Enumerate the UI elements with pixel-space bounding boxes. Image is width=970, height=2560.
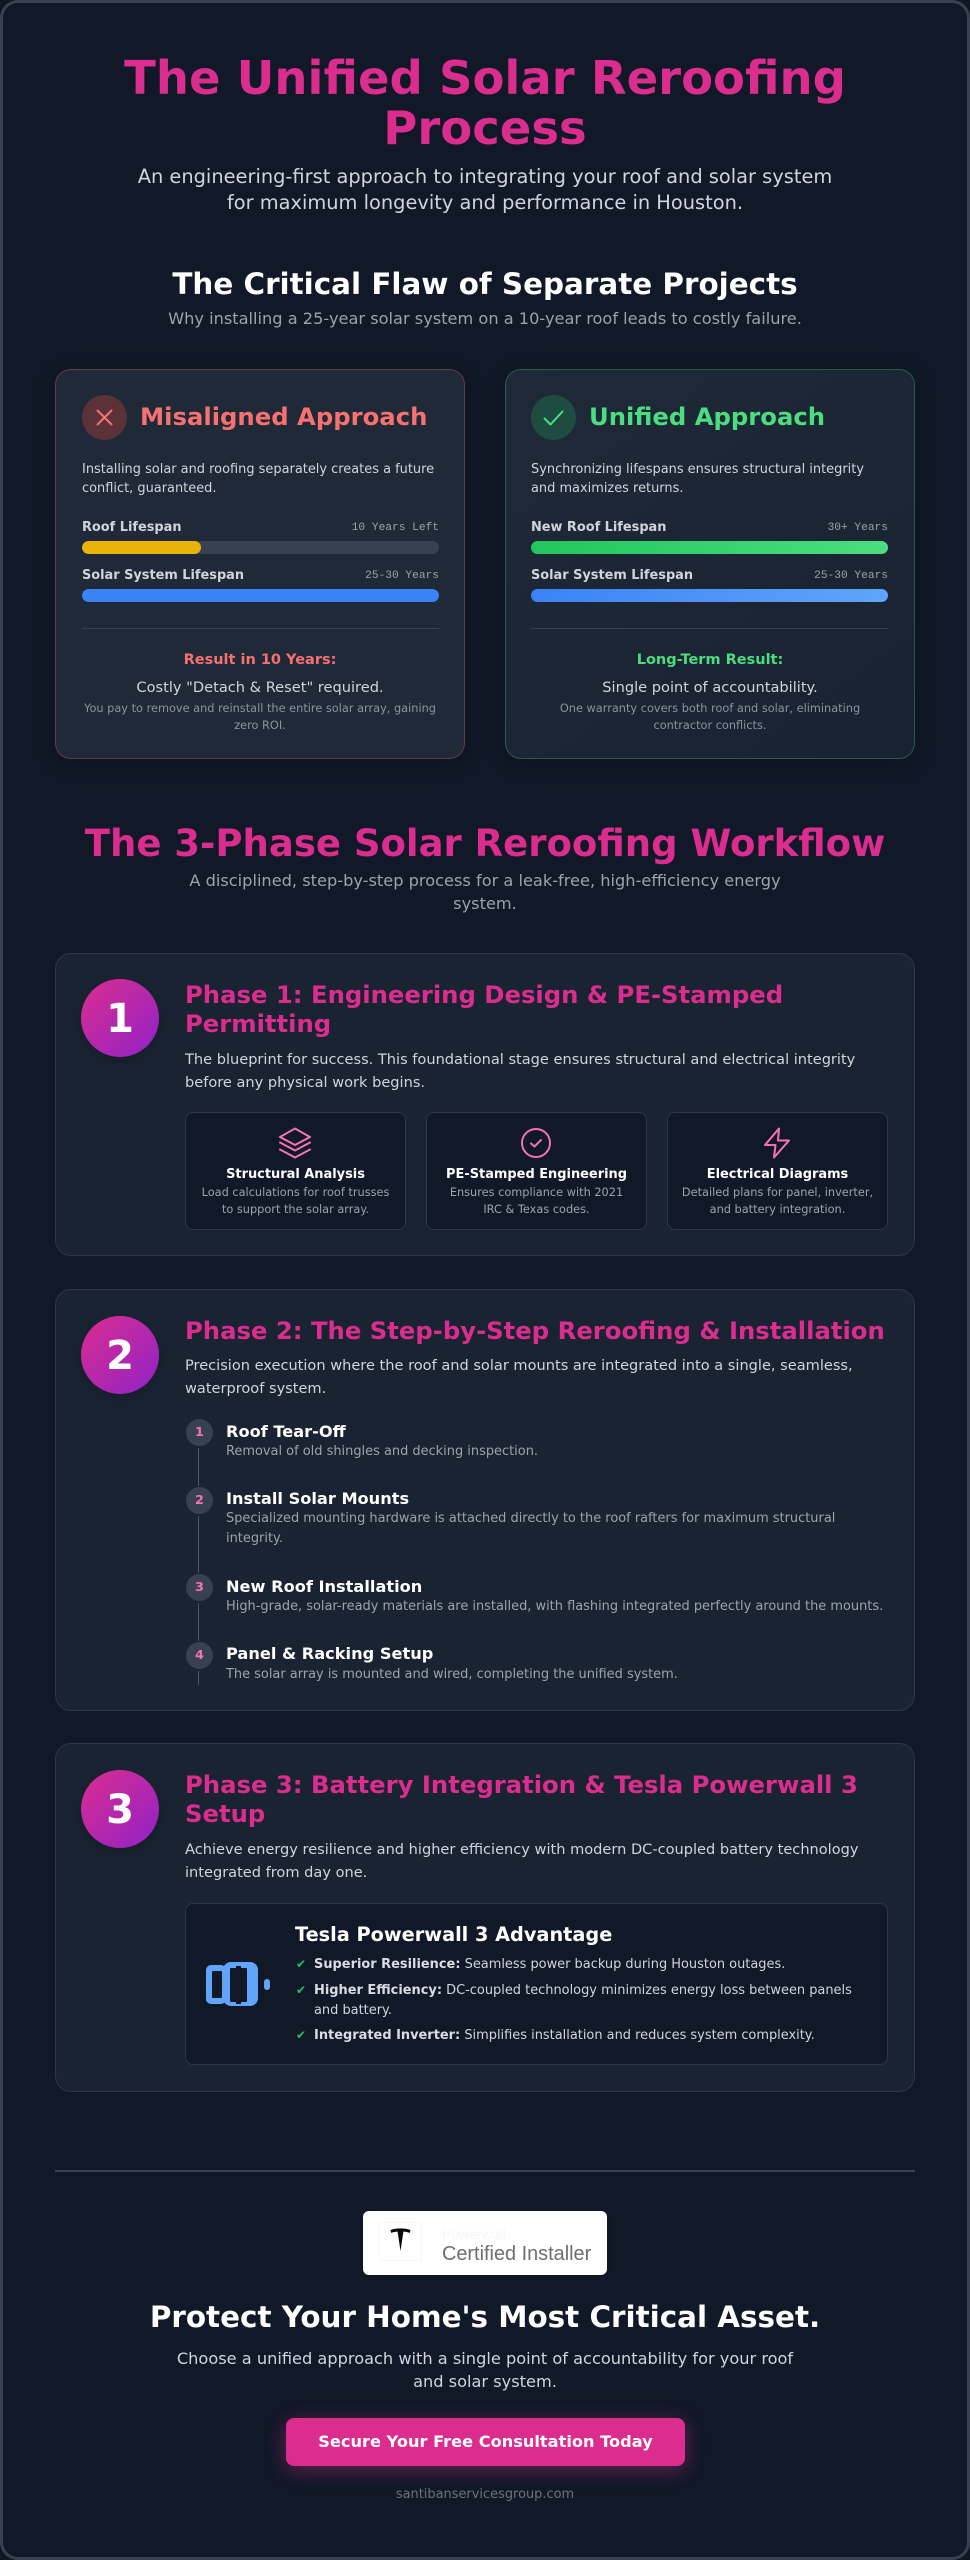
phase 1 description [184,1051,855,1091]
roof lifespan bar [82,541,439,554]
roof lifespan label: Roof Lifespan [82,520,182,535]
subheading: workflow [189,871,781,913]
website: santibanservicesgroup.com [396,2487,574,2502]
logo box [379,2222,422,2261]
closing text [177,2349,794,2391]
icon: x mark [82,395,127,440]
pe-stamped title: PE-Stamped Engineering [446,1167,627,1182]
electrical diagrams text: and battery integration. [710,1202,845,1216]
step 4 marker [186,1642,213,1669]
unified heading: Unified Approach [589,402,825,431]
phase 1 heading: Phase 1: Engineering Design & PE-Stamped [185,980,783,1009]
step 1 marker [186,1419,213,1446]
phase 1 description: The blueprint for success. This foundational stage ensures structural and electrical integrity [185,1051,855,1068]
new roof lifespan label: New Roof Lifespan [531,520,666,535]
subheading: workflow: A disciplined, step-by-step process for a leak-free, high-efficiency energy [189,871,781,890]
title: The Unified Solar Reroofing [124,51,846,105]
call to action button: Secure Your Free Consultation Today [318,2432,653,2451]
misaligned description [82,462,434,496]
result detail: You pay to remove and reinstall the entire solar array, gaining [84,701,436,715]
step 3 text: High-grade, solar-ready materials are installed, with flashing integrated perfectly around the mounts. [226,1599,883,1614]
electrical diagrams text [682,1185,873,1216]
subtitle: An engineering-first approach to integrating your roof and solar system [138,165,832,188]
panel: powerwall advantage [185,1903,888,2065]
step 4 text: The solar array is mounted and wired, completing the unified system. [226,1667,678,1682]
panel: phase 3 [55,1743,915,2092]
phase 3 number: 3 [106,1787,134,1833]
unified solar lifespan bar [531,589,888,602]
benefit 2: Higher Efficiency: DC-coupled technology minimizes energy loss between panels [314,1983,852,1998]
solar lifespan bar [82,589,439,602]
step 2 text: integrity. [226,1530,283,1546]
panel: misaligned approach [55,369,465,759]
step 3 marker: 3 [195,1580,204,1595]
unified solar lifespan label: Solar System Lifespan [531,568,693,583]
pe-stamped text [450,1185,623,1216]
unified description: Synchronizing lifespans ensures structural integrity [531,462,864,477]
step 3 marker [186,1574,213,1601]
pe-stamped text: IRC & Texas codes. [483,1202,590,1216]
sub-card: pe-stamped engineering [426,1112,647,1230]
benefit check 1: ✔ [296,1957,306,1971]
step 2 title: Install Solar Mounts [226,1489,409,1508]
title: Process [383,100,587,154]
benefit 2 [314,1983,852,2018]
call to action button [286,2418,685,2466]
heading: workflow: The 3-Phase Solar Reroofing Workflow [85,822,885,865]
subtitle [138,165,832,214]
result detail: zero ROI. [234,718,286,732]
phase 1 number [81,979,159,1057]
step 4 marker: 4 [195,1648,204,1663]
step 4 title: Panel & Racking Setup [226,1644,433,1663]
structural analysis text: to support the solar array. [222,1202,369,1216]
solar lifespan label: Solar System Lifespan [82,568,244,583]
result detail [84,701,436,732]
phase 3 description: integrated from day one. [185,1864,367,1881]
benefit check 2: ✔ [296,1983,306,1997]
phase 3 description [185,1841,859,1881]
panel: phase 1 [55,953,915,1256]
misaligned description: Installing solar and roofing separately creates a future [82,462,434,477]
electrical diagrams text: Detailed plans for panel, inverter, [682,1185,873,1199]
benefit 1: Superior Resilience: Seamless power backup during Houston outages. [314,1957,785,1972]
benefit 3: Integrated Inverter: Simplifies installation and reduces system complexity. [314,2028,815,2043]
unified description [531,462,864,496]
result text: Costly "Detach & Reset" required. [136,679,384,696]
unified solar lifespan value: 25-30 Years [814,570,888,582]
phase 1 heading [185,980,783,1038]
sub-card: structural analysis [185,1112,406,1230]
phase 2 description: Precision execution where the roof and solar mounts are integrated into a single, seamless, [185,1357,853,1374]
closing heading: Protect Your Home's Most Critical Asset. [150,2300,820,2334]
step 3 title: New Roof Installation [226,1577,422,1596]
long-term text: Single point of accountability. [602,679,818,696]
new roof lifespan bar [531,541,888,554]
icon: lightning bolt [764,1128,790,1158]
phase 3 heading [185,1770,858,1828]
subheading: workflow: system. [453,894,517,913]
benefit check 3: ✔ [296,2028,306,2042]
phase 2 number: 2 [106,1333,134,1379]
title [124,51,846,154]
powerwall heading: Tesla Powerwall 3 Advantage [295,1923,612,1946]
faint badge label: Powerwall [442,2226,506,2242]
panel: phase 2 [55,1289,915,1711]
step 2 marker: 2 [195,1493,204,1508]
step 1 title: Roof Tear-Off [226,1422,346,1441]
icon: check circle [521,1128,551,1158]
subtitle: for maximum longevity and performance in Houston. [227,191,743,214]
phase 3 heading: Setup [185,1799,265,1828]
phase 2 description: waterproof system. [185,1380,326,1397]
long-term detail: One warranty covers both roof and solar, eliminating [560,701,860,715]
phase 3 heading: Phase 3: Battery Integration & Tesla Powerwall 3 [185,1770,858,1799]
electrical diagrams title: Electrical Diagrams [707,1167,848,1182]
sub-card: electrical diagrams [667,1112,888,1230]
benefit 2: and battery. [314,2002,392,2018]
long-term detail [560,701,860,732]
step 1 text: Removal of old shingles and decking inspection. [226,1444,538,1459]
phase 1 number: 1 [106,996,134,1042]
structural analysis title: Structural Analysis [226,1167,365,1182]
phase 2 heading: Phase 2: The Step-by-Step Reroofing & Installation [185,1316,885,1345]
roof lifespan value: 10 Years Left [352,522,439,534]
phase 3 number [81,1770,159,1848]
phase 3 description: Achieve energy resilience and higher efficiency with modern DC-coupled battery technology [185,1841,859,1858]
icon: battery [206,1962,270,2006]
phase 1 heading: Permitting [185,1009,331,1038]
long-term heading: Long-Term Result: [637,652,783,668]
icon: layers [279,1128,311,1158]
closing text: Choose a unified approach with a single point of accountability for your roof [177,2349,793,2368]
solar lifespan value: 25-30 Years [365,570,439,582]
badge: tesla certified installer [363,2211,607,2275]
result heading: Result in 10 Years: [184,652,336,668]
step 2 text: Specialized mounting hardware is attached directly to the roof rafters for maximum structural [226,1511,835,1526]
structural analysis text: Load calculations for roof trusses [202,1185,389,1199]
long-term detail: contractor conflicts. [653,718,767,732]
badge label: Certified Installer [442,2243,591,2265]
icon: check mark [531,395,576,440]
subheading: critical flaw: Why installing a 25-year solar system on a 10-year roof leads to costly failure. [168,309,802,328]
step 2 marker [186,1487,213,1514]
heading: critical flaw: The Critical Flaw of Separate Projects [172,267,798,301]
misaligned description: conflict, guaranteed. [82,481,216,496]
step 2 text [226,1511,835,1546]
closing text: and solar system. [413,2372,557,2391]
structural analysis text [202,1185,389,1216]
misaligned heading: Misaligned Approach [140,402,427,431]
pe-stamped text: Ensures compliance with 2021 [450,1185,623,1199]
phase 2 description [185,1357,853,1397]
step 1 marker: 1 [195,1425,204,1440]
panel: unified approach [505,369,915,759]
phase 1 description: before any physical work begins. [185,1074,425,1091]
phase 2 number [81,1316,159,1394]
new roof lifespan value: 30+ Years [828,522,888,534]
unified description: and maximizes returns. [531,481,683,496]
